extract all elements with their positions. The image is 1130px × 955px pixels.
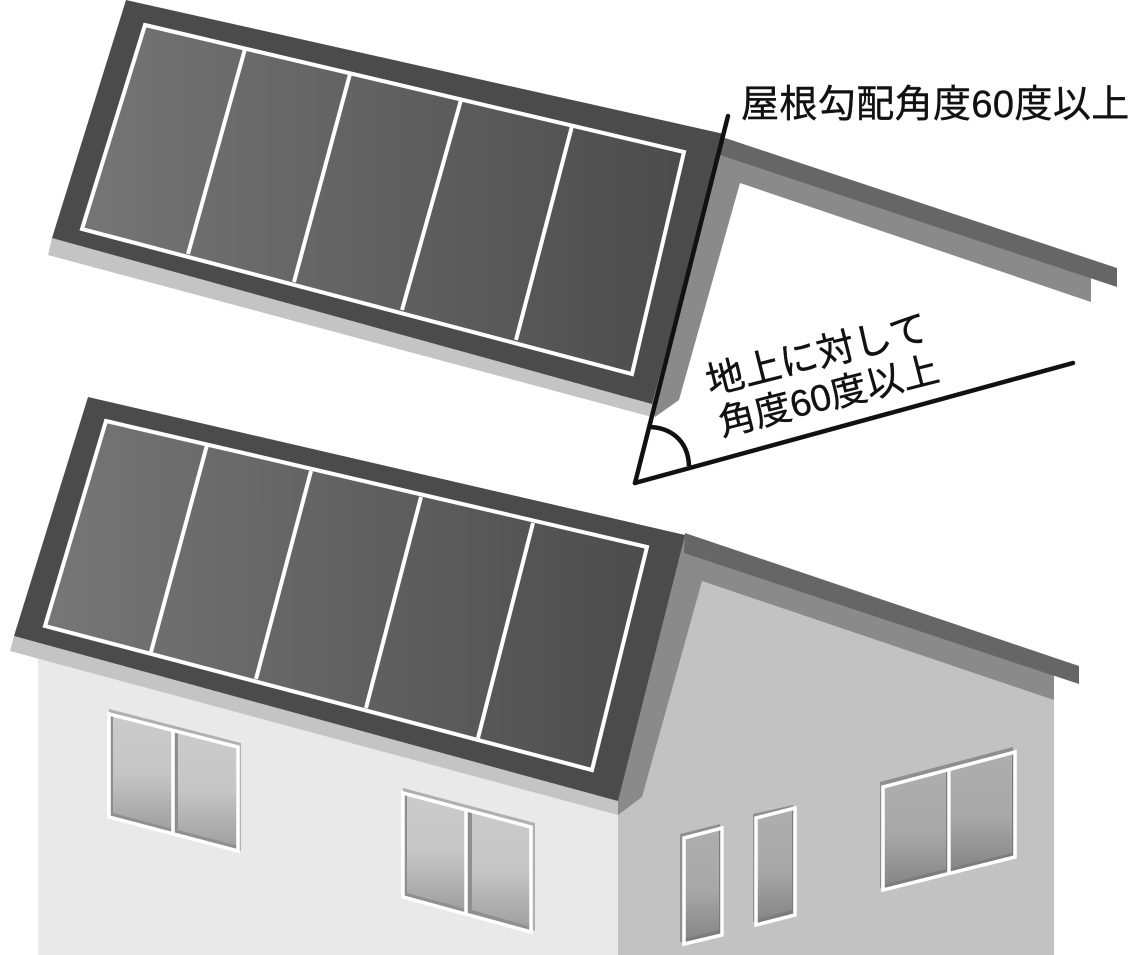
roof surface: [52, 0, 724, 404]
window: side narrow right: [753, 805, 795, 925]
label: angle relative to ground: 角度60度以上: [714, 349, 943, 444]
window: side narrow left: [680, 824, 722, 944]
side roof top edge: [684, 533, 1079, 684]
front wall: [38, 650, 618, 955]
roof surface: [14, 397, 685, 801]
upper roof section: [48, 0, 1117, 417]
eave shadow: [10, 636, 622, 815]
label: angle relative to ground: [702, 307, 943, 444]
side roof slope: [618, 535, 1054, 815]
solar panels: [45, 421, 647, 770]
angle arc: [651, 427, 689, 466]
window: side large: [880, 747, 1015, 890]
label: angle relative to ground: 地上に対して: [702, 307, 932, 404]
right side roof slope: [652, 137, 1091, 417]
ground reference line: [635, 363, 1073, 483]
window: front right: [403, 788, 535, 932]
side wall: [618, 575, 1054, 955]
label: roof pitch angle: 屋根勾配角度60度以上: [741, 84, 1130, 126]
lower house: [10, 397, 1079, 955]
window: front left: [109, 709, 241, 851]
vertical pitch line: [635, 116, 728, 483]
angle lines: [635, 116, 1073, 483]
roof underside shadow: [48, 238, 660, 417]
right roof top edge: [720, 137, 1117, 287]
solar panels: [82, 25, 684, 374]
